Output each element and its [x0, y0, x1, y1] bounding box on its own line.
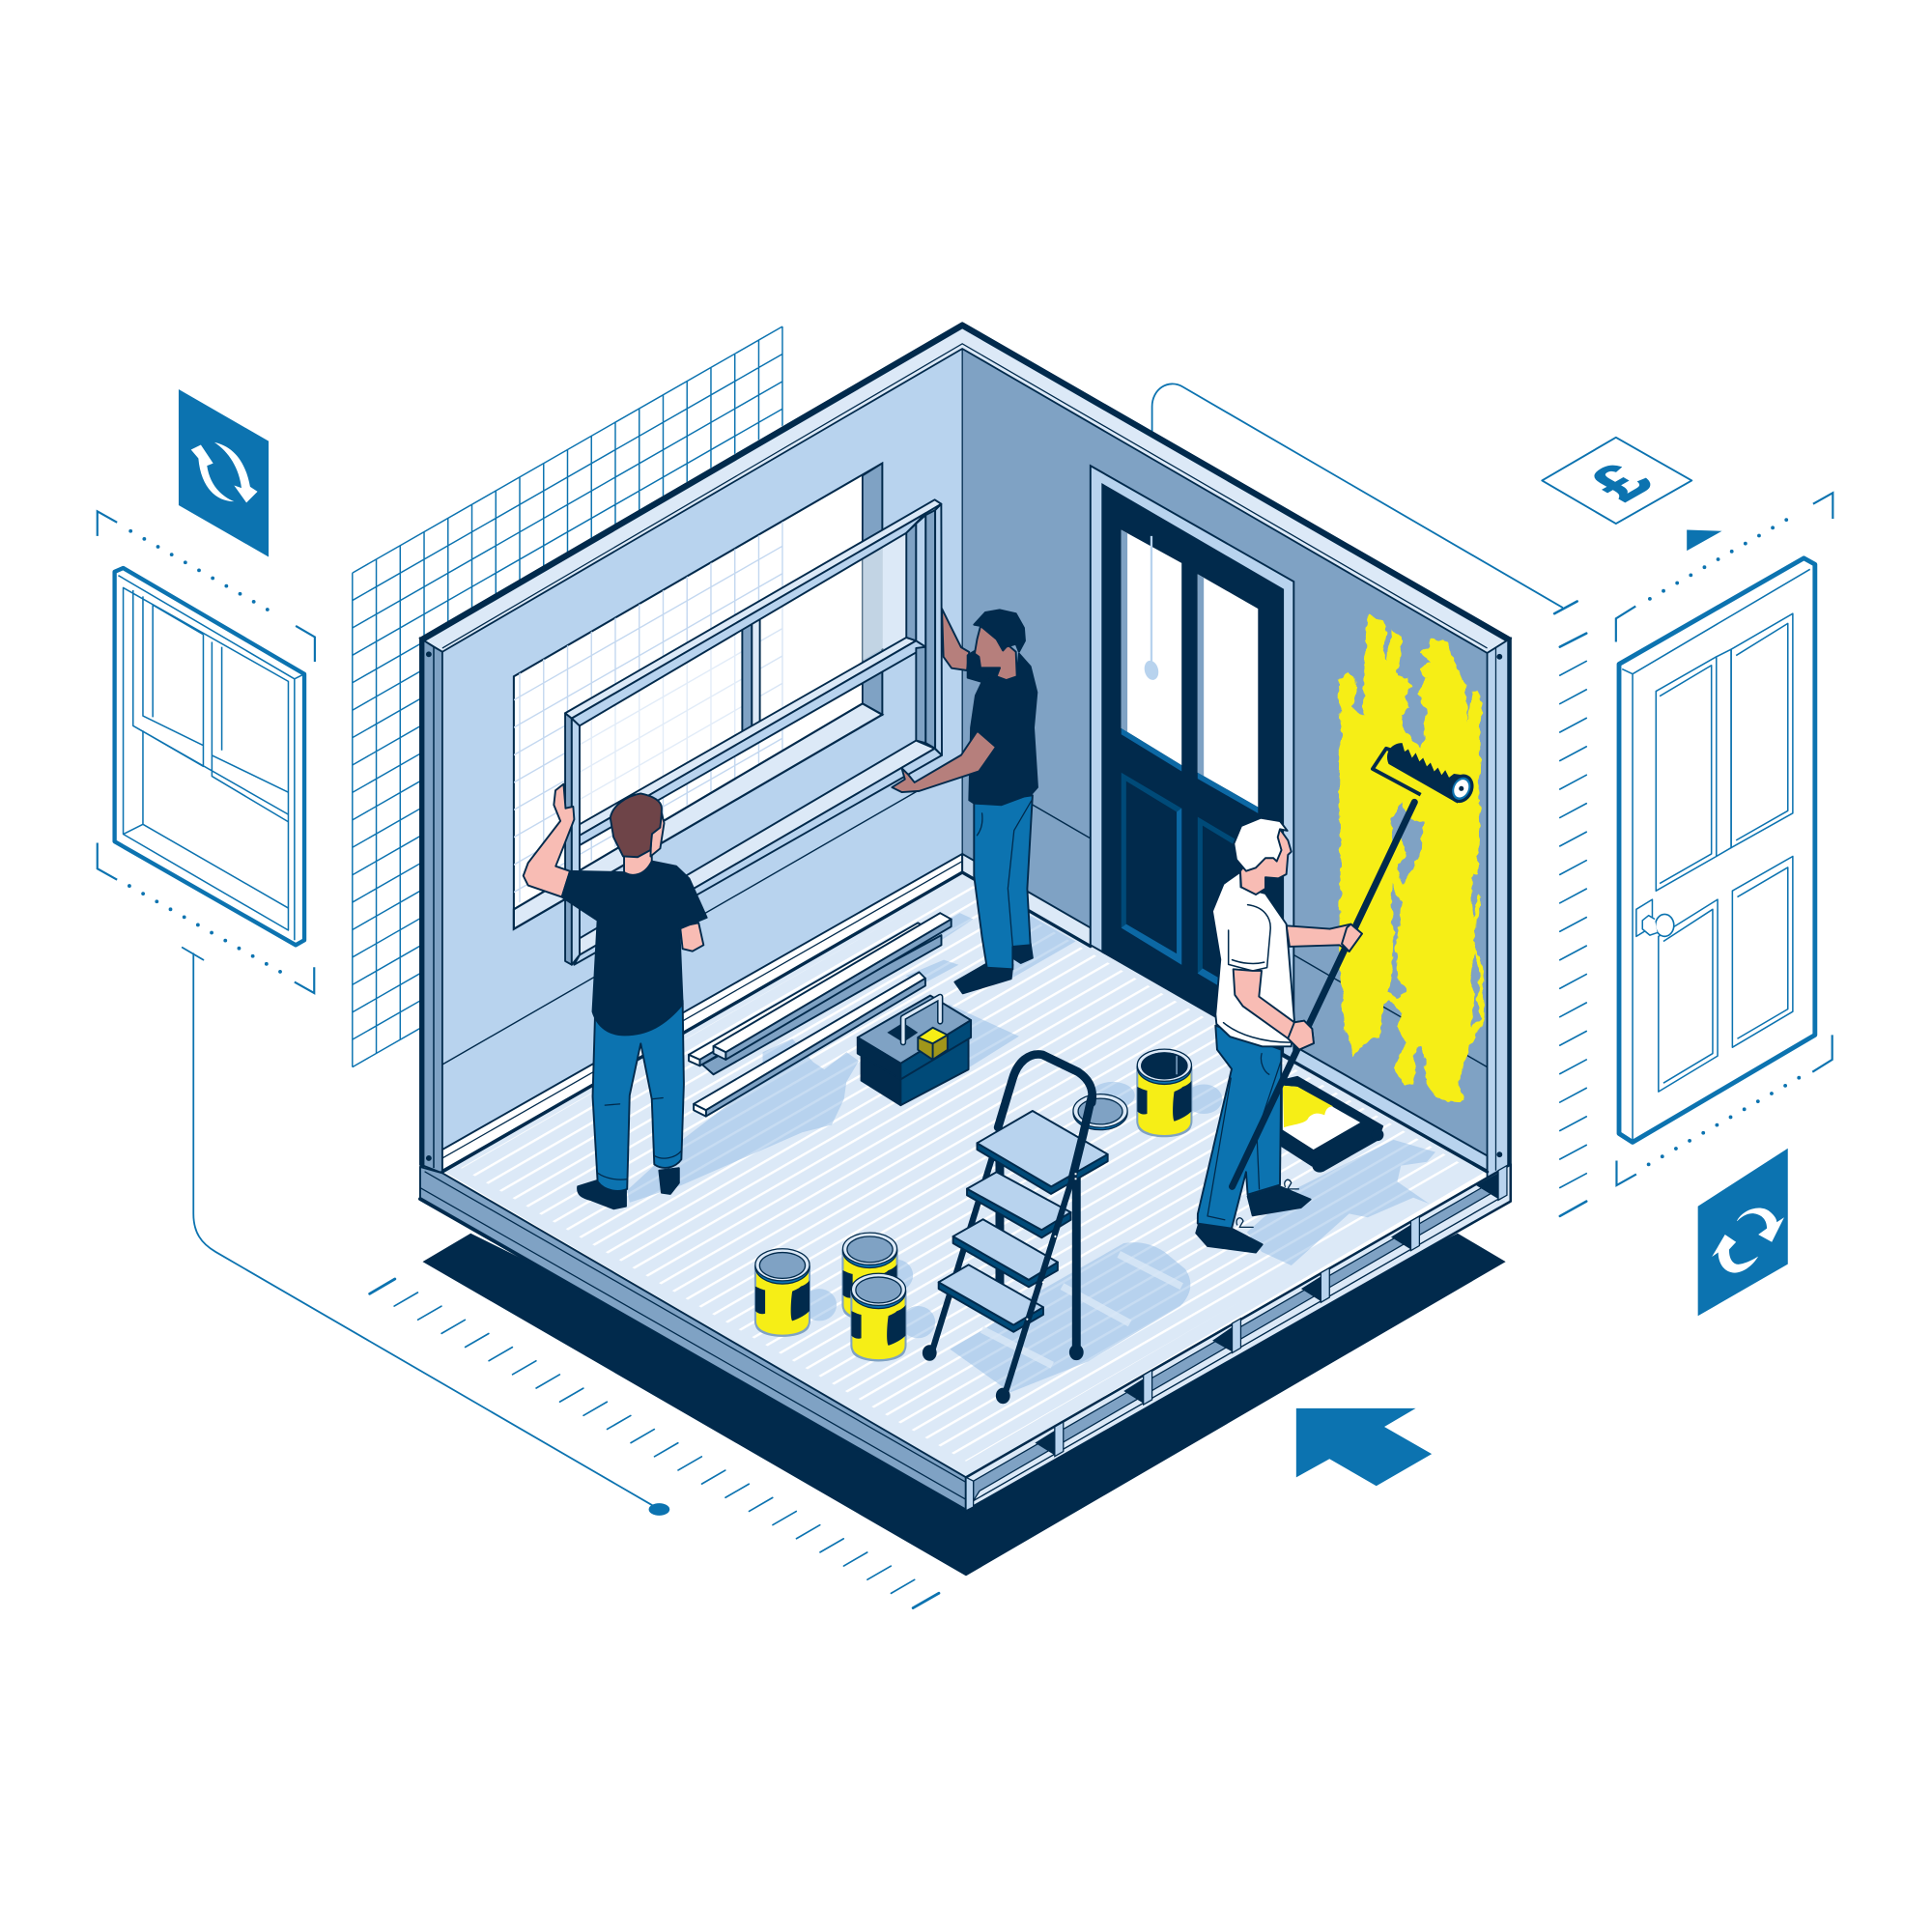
pound sign diamond [1542, 438, 1691, 524]
door glazing [1122, 529, 1181, 765]
front rail [1072, 1096, 1092, 1179]
far arm [1287, 924, 1362, 952]
floor [442, 870, 1488, 1477]
shoes [578, 1168, 679, 1208]
wall dado lines [442, 765, 1488, 1067]
rear supports [996, 1162, 1003, 1285]
left corner post [420, 639, 442, 1173]
left window icon [115, 568, 304, 945]
ground shadow [423, 1234, 1506, 1576]
tick marks lower left [370, 1279, 939, 1608]
top beam [420, 323, 1511, 653]
pound sign diamond: £ [1572, 454, 1669, 510]
toolbox [858, 996, 971, 1105]
paint cans group [755, 1233, 906, 1361]
timber lengths [689, 913, 952, 1117]
shoulder and raised hand shadow [968, 650, 1000, 682]
skirting boards [442, 854, 1488, 1172]
raised arm [524, 784, 574, 897]
right door icon [1619, 558, 1815, 1142]
t-shirt [969, 654, 1037, 805]
shadow: step ladder [950, 1242, 1190, 1392]
person: painter with white hair [1196, 818, 1362, 1253]
tick marks right [1554, 601, 1586, 1216]
head [650, 813, 665, 856]
step ladder [923, 1054, 1108, 1404]
shoes [1248, 1186, 1311, 1215]
second step [967, 1189, 1070, 1237]
window opening in left wall [512, 462, 885, 931]
yellow paint on wall [1338, 615, 1486, 1101]
right door dotted brackets [1616, 493, 1833, 1185]
ladder shadow highlights [982, 1254, 1181, 1365]
third step [953, 1236, 1058, 1287]
person: man with dark skin at window [892, 609, 1037, 993]
isometric grid behind left wall [353, 327, 782, 1067]
face [975, 626, 1017, 680]
painter hands over pole [1288, 924, 1362, 1050]
room shell [420, 323, 1511, 1199]
right wall [962, 349, 1488, 1164]
shadow: second man and timber [906, 913, 1076, 983]
left wall [442, 349, 962, 1164]
shadow: painter [1247, 1140, 1435, 1265]
shadow: man at window [627, 1038, 859, 1203]
shadow: toolbox [949, 1005, 1019, 1066]
bottom step [939, 1282, 1043, 1332]
replacement window frame [565, 499, 942, 965]
left refresh badge [179, 389, 269, 557]
small triangle marker [1687, 529, 1722, 551]
platform right face with slots [966, 1164, 1511, 1511]
left connector line [183, 948, 669, 1516]
door [1091, 466, 1293, 1060]
far arm [942, 609, 969, 670]
jeans [1198, 1026, 1282, 1229]
near arm [892, 731, 996, 792]
face [1240, 829, 1292, 895]
paint roller [1233, 743, 1478, 1186]
door lower panels [1122, 773, 1181, 965]
t-shirt [1212, 872, 1294, 1046]
right refresh badge [1698, 1149, 1788, 1316]
jeans [974, 795, 1033, 969]
blind cord [1151, 536, 1152, 663]
neck [624, 850, 652, 875]
forearm [680, 923, 703, 952]
left window dotted brackets [98, 511, 315, 993]
person: man with brown hair at window [524, 784, 707, 1208]
top platform [977, 1143, 1108, 1194]
shoes [1012, 944, 1033, 963]
open paint can [1137, 1049, 1191, 1137]
paint tray [1282, 1077, 1383, 1173]
platform left face [420, 1167, 966, 1511]
hair [1234, 818, 1288, 871]
direction arrow [1296, 1408, 1432, 1486]
t-shirt [562, 862, 707, 1035]
hair [974, 610, 1025, 652]
floor shadows [627, 913, 1435, 1392]
connector line top right [1152, 384, 1562, 608]
jeans [593, 1001, 684, 1191]
right corner post [1488, 639, 1511, 1182]
paint can lid [1073, 1094, 1127, 1130]
near arm [1234, 969, 1314, 1050]
